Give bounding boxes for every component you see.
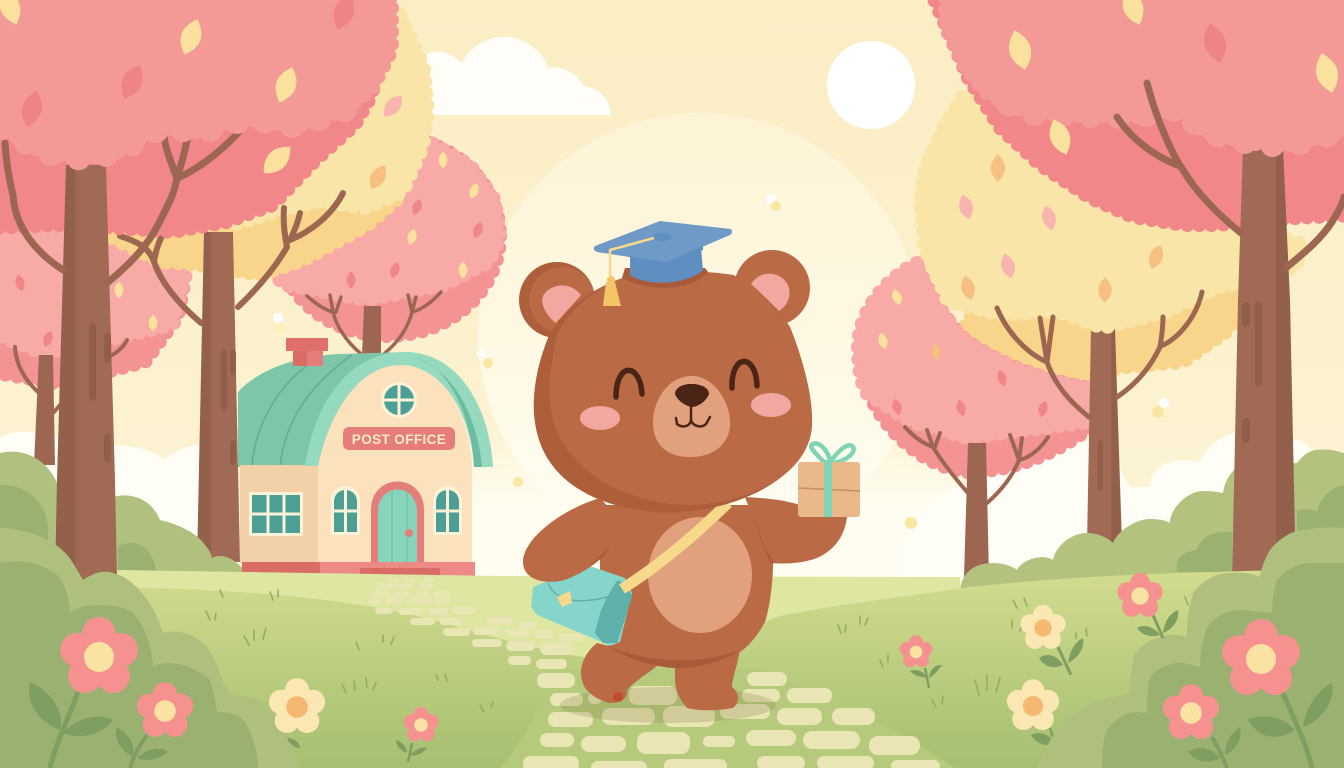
clouds: horizon center [472, 420, 962, 580]
left leg [581, 643, 665, 703]
clouds: horizon right [899, 433, 1344, 580]
flower: small pink right [1163, 684, 1241, 768]
side window [249, 492, 303, 536]
tree: behind post office pink [272, 136, 500, 356]
roof back [238, 352, 410, 467]
pale halo behind bear [478, 113, 922, 557]
right arm [745, 497, 847, 563]
flower: tiny pink right [900, 635, 942, 688]
main wall [318, 365, 472, 563]
right eye [732, 361, 757, 388]
flower: small pink left [116, 682, 193, 768]
muzzle [653, 376, 730, 457]
tree: right yellow front layer [920, 97, 1305, 490]
tree: right yellow trunk [1087, 328, 1122, 545]
left arm [523, 498, 630, 582]
tree: right pink mid [858, 263, 1092, 578]
right cheek [751, 393, 791, 417]
sign: POST OFFICE [352, 432, 446, 447]
tree: top-left big pink [0, 0, 392, 580]
grass tufts [206, 590, 1197, 712]
front bush left [0, 528, 300, 768]
tree: top-right big pink [930, 0, 1344, 580]
belly [648, 517, 752, 633]
door [371, 482, 424, 563]
head [534, 271, 812, 512]
sun [827, 41, 915, 129]
flower: cream left [269, 678, 325, 748]
arch window left [331, 486, 360, 535]
left ear [519, 262, 595, 338]
right ear [734, 250, 810, 326]
nose [675, 384, 709, 407]
flower: tiny pink left [396, 707, 439, 762]
sign [343, 427, 455, 450]
meadow back [117, 570, 960, 768]
clouds: horizon left [0, 432, 245, 578]
right leg [675, 648, 740, 710]
path stones [368, 578, 940, 768]
graduation cap [594, 221, 732, 306]
torso [590, 505, 773, 663]
gift box [798, 443, 860, 517]
path surround [500, 668, 955, 768]
tree: right yellow back layer [960, 250, 1240, 383]
chimney [286, 338, 328, 366]
flower: cream right bottom [1007, 679, 1072, 752]
round window [381, 382, 417, 418]
flower: pink right top [1117, 573, 1178, 638]
flower: cream right top [1020, 605, 1083, 675]
side wall [240, 465, 320, 563]
roof front band [305, 352, 493, 467]
foundation [242, 562, 320, 576]
strap [622, 503, 728, 589]
smile [676, 405, 710, 426]
post office building [238, 338, 493, 576]
flower: large pink right [1222, 619, 1332, 768]
back bushes right [960, 449, 1344, 590]
tree: yellow left [112, 15, 428, 562]
tree: far left pink [0, 235, 186, 465]
arch window right [433, 486, 462, 535]
left cheek [580, 406, 620, 430]
bag [531, 565, 632, 646]
torso shading [607, 645, 740, 668]
left eye [616, 370, 642, 397]
sparkles [273, 194, 1169, 529]
ground shadow [560, 687, 776, 723]
flower: large pink left [29, 617, 138, 768]
meadow front [0, 569, 1344, 768]
back bushes left [0, 452, 247, 578]
bear character [519, 221, 860, 723]
cloud: top [423, 37, 611, 115]
front bush right [1037, 527, 1344, 768]
